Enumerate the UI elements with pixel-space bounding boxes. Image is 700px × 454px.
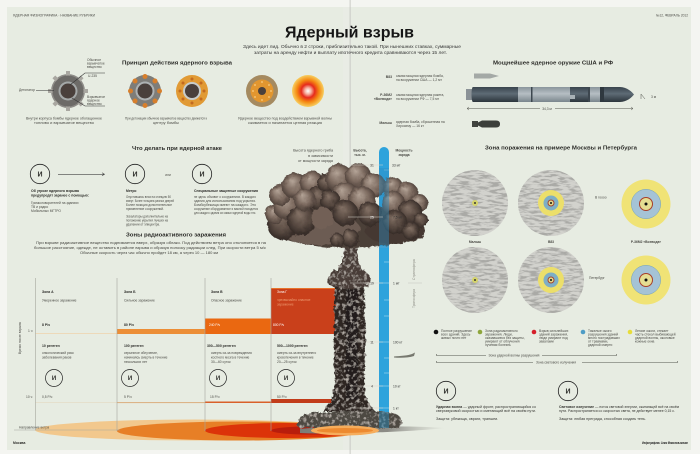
scale labels and ticks: 7,5 мт bbox=[393, 216, 403, 220]
scale labels and ticks: 2 bbox=[371, 406, 373, 410]
heading: weapons: Мощнейшее ядерное оружие США и РФ bbox=[493, 60, 613, 66]
icon: step three: И bbox=[199, 172, 205, 178]
label: height axis bbox=[353, 148, 367, 157]
legend: оказавшиеся без защиты, bbox=[485, 336, 525, 340]
column: zone G: заражение bbox=[277, 302, 294, 306]
diagram: critical mass bbox=[246, 75, 278, 107]
text: shelters: не здесь объявят о сооружениях. В каждого bbox=[194, 195, 256, 199]
scale labels and ticks: 19 bbox=[370, 282, 374, 286]
legend: зданий заражения, bbox=[539, 332, 568, 336]
diagram: bomb structure: вещество bbox=[87, 102, 102, 106]
labels: weapons: Хиросиму — 16 кт bbox=[396, 124, 424, 128]
heading: damage zones: Зона поражения на примере Москвы и Петербурга bbox=[485, 144, 638, 152]
column: zone B: 80 Р/ч bbox=[124, 323, 134, 327]
map: Moscow, Malysh bbox=[442, 170, 508, 236]
intro text: Здесь идет лид. Обычно в 2 строки, приблизительно такой. При нынешних ставках, суммарные bbox=[243, 44, 462, 49]
text: shelters: для каждого здания из самых ядерной воды это. bbox=[194, 211, 256, 215]
note: light radiation: Защита: любая преграда, способная создать тень. bbox=[559, 417, 646, 421]
legend: Взрыв сильнейших bbox=[539, 329, 569, 333]
icon: B83 bomb bbox=[474, 74, 499, 78]
image: mushroom cloud bbox=[265, 163, 428, 428]
panel: what to do in an attack bbox=[30, 145, 258, 226]
legend: Тяжелые ожоги bbox=[588, 329, 612, 333]
legend: умирают от облучения bbox=[485, 340, 520, 344]
icon: step one: И bbox=[37, 172, 43, 178]
note: shock wave: Защита: убежища, овраги, траншеи. bbox=[436, 417, 498, 421]
column: zone B bbox=[122, 290, 168, 399]
diagram: bomb structure: взрывчатое bbox=[87, 62, 105, 66]
legend: кожные окна bbox=[635, 340, 655, 344]
legend: завалами bbox=[539, 340, 554, 344]
panel: principle of the nuclear explosion bbox=[19, 58, 333, 125]
header: issue: №12, ФЕВРАЛЬ 2012 bbox=[656, 14, 688, 18]
legend: часть стекол выбивающей bbox=[635, 332, 676, 336]
captions: топливо и взрывчатое вещество bbox=[34, 121, 94, 125]
heading: principle: Принцип действия ядерного взрыва bbox=[122, 60, 233, 66]
scale labels and ticks: 1 мт bbox=[393, 282, 400, 286]
text: metro bbox=[126, 189, 174, 226]
note: shock wave bbox=[436, 381, 536, 421]
legend: ударной волны, ожоговые bbox=[635, 336, 675, 340]
captions: Внутри корпуса бомбы ядерное обогащенное bbox=[26, 116, 102, 120]
column: zone B: Зона Б bbox=[124, 290, 136, 294]
text: warning: предупредят заранее с помощью: bbox=[31, 194, 89, 198]
legend bbox=[434, 329, 676, 347]
brackets: Зона светового излучения bbox=[536, 360, 576, 364]
panel: radiation zones bbox=[13, 232, 365, 445]
diagram: bomb structure: Обычное bbox=[87, 58, 101, 62]
scale labels and ticks: 31 bbox=[370, 164, 374, 168]
note: light radiation: И bbox=[565, 388, 571, 396]
legend: заражения. Люди, bbox=[485, 332, 513, 336]
column: zone A: заболевания раков bbox=[42, 356, 72, 360]
column: zone B: 5 Р/ч bbox=[124, 395, 132, 399]
epicentre ellipse bbox=[311, 426, 379, 436]
map: St Petersburg, B83 bbox=[518, 247, 584, 313]
map labels: В гоооо bbox=[595, 196, 607, 200]
column: zone V: Опасное заражение bbox=[211, 298, 242, 302]
column: zone A: Зона А bbox=[42, 290, 54, 294]
heading: radiation zones: Зоны радиоактивного заражения bbox=[126, 232, 226, 238]
legend: люди умирают под bbox=[539, 336, 568, 340]
column: zone G: чрезвычайно опасное bbox=[277, 298, 311, 302]
text: shelters bbox=[194, 189, 258, 215]
column: zone A: 8 Р/ч bbox=[42, 323, 50, 327]
note: shock wave: сверхзвуковой скоростью и сметающий всё на своём пути. bbox=[436, 409, 536, 413]
diagram: bomb structure: Взрывчатое bbox=[87, 95, 105, 99]
grid lines bbox=[14, 278, 271, 431]
captions: Ядерное вещество под воздействием взрывной волны bbox=[238, 116, 333, 120]
column: zone G: 20—25 суток bbox=[277, 360, 297, 364]
cloud cap bbox=[265, 163, 428, 248]
map: St Petersburg, Malysh bbox=[442, 247, 508, 313]
scale labels and ticks: 1 кт bbox=[393, 406, 399, 410]
legend: Зона радиоактивного bbox=[485, 329, 518, 333]
column: zone A: И bbox=[52, 376, 56, 382]
diagram: bomb structure bbox=[19, 58, 105, 111]
legend: разрушения зданий bbox=[588, 332, 618, 336]
column: zone B: 100 рентген bbox=[124, 344, 144, 348]
heading: cloud height: Высота ядерного гриба bbox=[293, 148, 334, 152]
atmosphere labels: Стратосфера bbox=[412, 259, 416, 280]
intro: radiation zones: При взрыве радиоактивное вещество поднимается вверх, образуя облако. Под действием ветра оно отклоняется в на bbox=[36, 241, 266, 245]
column: zone V: 15 Р/ч bbox=[210, 395, 220, 399]
heading: cloud height: от мощности заряда bbox=[298, 159, 334, 163]
labels: weapons: Малыш bbox=[379, 121, 392, 125]
text: metro: Опустившись вниз на станцию 50 bbox=[126, 195, 171, 199]
panel: damage zones in Moscow and St Petersburg bbox=[434, 144, 688, 445]
intro: radiation zones bbox=[34, 241, 266, 255]
heading: cloud height bbox=[293, 148, 334, 163]
column: zone G bbox=[273, 290, 316, 399]
map: St Petersburg, Voevoda bbox=[622, 256, 670, 304]
icon: step three bbox=[192, 164, 212, 184]
atmosphere labels: Тропосфера bbox=[412, 289, 416, 308]
chart: zone bars bbox=[36, 288, 338, 403]
text: warning bbox=[31, 189, 89, 213]
labels: weapons: на вооружении РФ — 7,5 мт bbox=[396, 97, 439, 101]
diagram: bomb structure: U-235 bbox=[88, 74, 97, 78]
arrow bbox=[58, 173, 104, 176]
column: zone G: Зона Г bbox=[277, 290, 287, 294]
map labels bbox=[469, 196, 661, 280]
axis labels bbox=[13, 322, 49, 445]
icon: step two: И bbox=[132, 172, 138, 178]
label: yield axis: заряда bbox=[398, 153, 410, 157]
icon: airplane bbox=[394, 352, 415, 358]
text: warning: Громкоговорителей на зданиях bbox=[31, 201, 79, 205]
text: shelters: сооружение оборудованное и важной находится bbox=[194, 207, 258, 211]
column: zone A bbox=[42, 290, 77, 399]
note: shock wave: Ударная волна — ударный фронт, распространяющийся со bbox=[436, 405, 536, 409]
column: zone B: начинаясь смерть в течение bbox=[124, 356, 168, 360]
note: shock wave: И bbox=[443, 388, 449, 396]
icon: Little Boy bomb bbox=[472, 120, 500, 128]
dimension: missile length bbox=[467, 107, 633, 111]
legend: лучевая болезнь bbox=[485, 343, 511, 347]
label: yield axis bbox=[396, 148, 412, 157]
blue scale over cloud bbox=[379, 168, 389, 248]
map labels: Малыш bbox=[469, 240, 481, 244]
labels: weapons bbox=[374, 74, 445, 128]
legend: Полное разрушение bbox=[441, 329, 472, 333]
column: zone G: кровотечения в течение bbox=[277, 356, 314, 360]
intro text bbox=[243, 44, 462, 55]
legend: от травмами, bbox=[588, 340, 608, 344]
note: light radiation: пути. Распространяется со скоростью света, не действует менее 0,15 с. bbox=[559, 409, 675, 413]
legend: всех зданий. Здесь bbox=[441, 332, 471, 336]
column: zone B: нескольких лет bbox=[124, 360, 148, 364]
map labels: Р-36М2 «Воевода» bbox=[631, 240, 661, 244]
cloud base bbox=[297, 410, 402, 428]
column: zone V: Зона В bbox=[211, 290, 223, 294]
label: height axis: Высота, bbox=[353, 148, 367, 152]
text: shelters: Бомбоубежища имеют на каждого. Это bbox=[194, 203, 256, 207]
captions bbox=[26, 116, 333, 125]
text: shelters: Специальные защитные сооружения bbox=[194, 189, 258, 193]
chart: fallout plume bbox=[35, 420, 365, 440]
atmosphere labels bbox=[408, 259, 422, 308]
icon: missile bbox=[466, 87, 634, 102]
text: metro: Метро bbox=[126, 189, 136, 193]
diagram: bomb structure: вещество bbox=[87, 65, 102, 69]
label: or: или bbox=[165, 173, 171, 177]
column: zone A: 0,5 Р/ч bbox=[42, 395, 53, 399]
dimension: missile diameter: 3 м bbox=[651, 95, 657, 99]
column: zone G: 800 Р/ч bbox=[273, 323, 285, 327]
column: zone V: И bbox=[216, 376, 220, 382]
brackets bbox=[436, 354, 678, 364]
label: yield axis: Мощность bbox=[396, 148, 412, 152]
diagram: detonators fire bbox=[128, 74, 162, 108]
labels: weapons: B83 bbox=[386, 75, 392, 79]
column: zone A: 10 рентген bbox=[42, 344, 60, 348]
intro: radiation zones: Обычные скорость через час обычно пройдет 18 км, а через 10 — 180 км bbox=[80, 251, 219, 255]
labels: weapons: «Воевода» bbox=[374, 97, 392, 101]
column: zone A: Умеренное заражение bbox=[42, 298, 77, 302]
captions: При детонации обычное взрывчатое вещество движется к bbox=[125, 116, 208, 120]
column: zone V: 30—60 суток bbox=[211, 360, 231, 364]
labels: weapons: самая мощная ядерная ракета, bbox=[396, 93, 444, 97]
heading: attack: Что делать при ядерной атаке bbox=[132, 145, 222, 152]
map: Moscow, B83 bbox=[518, 170, 584, 236]
legend: много пострадавших bbox=[588, 336, 620, 340]
axis labels: Москва bbox=[13, 441, 25, 445]
label: height axis: тыс. м. bbox=[354, 153, 366, 157]
column: zone G: 50 Р/ч bbox=[277, 395, 287, 399]
column: zone B: серьезное облучение, bbox=[124, 351, 158, 355]
column: zone V: 240 Р/ч bbox=[209, 323, 221, 327]
title: Ядерный взрыв bbox=[285, 24, 414, 42]
text: metro: Более позиции дополнительное bbox=[126, 203, 172, 207]
text: warning: Мобильных МГТРО bbox=[31, 209, 61, 213]
map labels: Петербург bbox=[589, 276, 605, 280]
legend: живых почти нет bbox=[441, 336, 467, 340]
column: zone G: смерть из-за внутреннего bbox=[277, 351, 316, 355]
ground dust bbox=[300, 426, 446, 434]
note: light radiation bbox=[558, 381, 679, 421]
column: zone G: И bbox=[284, 376, 288, 382]
labels: weapons: ядерная бомба, сброшенная на bbox=[396, 120, 445, 124]
scale labels and ticks: 4 bbox=[371, 384, 373, 388]
text: shelters: здания для использования под укрытия. bbox=[194, 199, 256, 203]
scale labels and ticks: 100 кт bbox=[393, 340, 403, 344]
column: zone V bbox=[207, 290, 252, 399]
scale labels and ticks bbox=[348, 164, 403, 410]
scale labels and ticks: 11 bbox=[370, 340, 374, 344]
axis labels: Направление ветра bbox=[19, 426, 49, 430]
icon: step one bbox=[30, 164, 50, 184]
scale over base bbox=[379, 412, 389, 428]
axis labels: 1 ч bbox=[28, 329, 33, 333]
scale labels and ticks: 25 bbox=[370, 216, 374, 220]
brackets: Зона ударной волны разрушения bbox=[489, 354, 540, 358]
intro: radiation zones: большое расстояние, одежде, не оставить в районе взрыва и образуя полоску радиации след. При скорости ветра 5 м/с bbox=[34, 246, 266, 250]
cloud stem bbox=[322, 235, 376, 412]
scale labels and ticks: 10 кт bbox=[393, 384, 401, 388]
diagram: compression wave bbox=[176, 75, 208, 107]
labels: weapons: Р-36М2 bbox=[380, 93, 392, 97]
axis labels: 10 ч bbox=[26, 395, 33, 399]
chart: blue height scale bbox=[379, 147, 389, 430]
axis labels: Время после взрыва bbox=[18, 322, 22, 354]
map: Moscow, Voevoda bbox=[622, 180, 670, 228]
map labels: B83 bbox=[548, 240, 554, 244]
legend: Легкие ожоги, стекает bbox=[635, 329, 669, 333]
column: zone V: костного мозга в течение bbox=[211, 356, 250, 360]
dimension: missile diameter bbox=[641, 94, 657, 99]
column: zone V: 300—500 рентген bbox=[207, 344, 236, 348]
column: zone B: И bbox=[128, 376, 132, 382]
dimension: missile length: 34,3 м bbox=[542, 107, 553, 111]
diagram: bomb structure: ядерное bbox=[87, 98, 100, 102]
note: light radiation: Световое излучение — поток световой энергии, сжигающей всё на своём bbox=[559, 405, 679, 409]
scale labels and ticks: 33 мт bbox=[392, 164, 401, 168]
column: zone B: Сильное заражение bbox=[124, 298, 155, 302]
text: warning: Об угрозе ядерного взрыва bbox=[31, 189, 79, 193]
column: zone V: смерть из-за повреждения bbox=[211, 351, 252, 355]
labels: weapons: на вооружении США — 1,2 мт bbox=[396, 78, 442, 82]
text: warning: ТВ и радио bbox=[31, 205, 48, 209]
panel: most powerful weapons bbox=[374, 60, 657, 128]
diagram: bomb structure: Детонатор bbox=[19, 88, 35, 92]
text: metro: удалении от эпицентра. bbox=[126, 222, 160, 226]
captions: сжимается и начинается цепная реакция bbox=[248, 121, 322, 125]
text: metro: минут. Более толщина разных дверей bbox=[126, 199, 174, 203]
icon: step two bbox=[125, 164, 145, 184]
text: metro: применение сооружений. bbox=[126, 207, 164, 211]
captions: центру бомбы bbox=[153, 121, 180, 125]
column: zone A: онкологический риск bbox=[42, 351, 74, 355]
labels: weapons: самая мощная ядерная бомба, bbox=[396, 74, 444, 78]
diagram: fireball bbox=[292, 75, 324, 107]
legend: ударной смерти bbox=[588, 343, 613, 347]
heading: cloud height: в зависимости bbox=[308, 154, 333, 158]
text: metro: Эскалаторы дополнительно на bbox=[126, 214, 168, 218]
text: metro: положение укрытия лучших на bbox=[126, 218, 168, 222]
column: zone G: 500—1000 рентген bbox=[277, 344, 308, 348]
intro text: затраты на аренду нефти и выплату ипотечного кредита сравниваются через 15 лет. bbox=[254, 50, 447, 55]
header: section label: ЯДЕРНАЯ ФИЗИОГРАФИКА · НАЗВАНИЕ РУБРИКИ bbox=[13, 14, 96, 18]
